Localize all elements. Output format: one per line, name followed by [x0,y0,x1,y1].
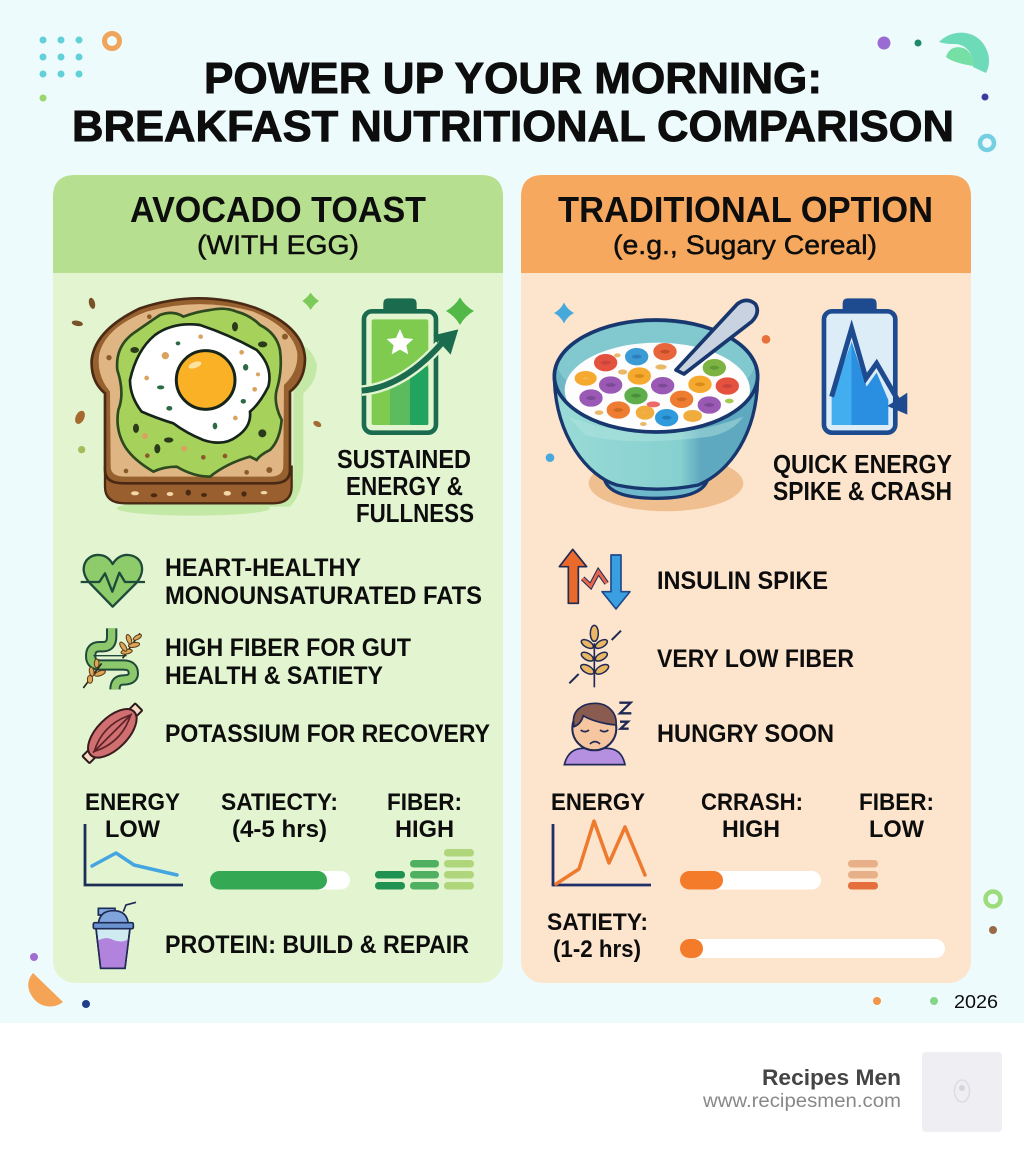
text: protein: PROTEIN: BUILD & REPAIR [165,931,469,959]
panel header: avocado toast [53,175,503,273]
stat: satiety bar: (4-5 hrs) [232,816,327,843]
panel header: avocado toast: AVOCADO TOAST [130,189,426,230]
stat: satiety bar [210,789,350,890]
logo tile [922,1052,1002,1132]
decorative dots and year: 2026 [954,992,998,1012]
footer branding: Recipes Men [762,1065,901,1090]
icon: cereal bowl [546,300,770,511]
stat: fiber high: HIGH [395,816,454,843]
title: POWER UP YOUR MORNING: [204,54,822,103]
stat: fiber high [375,789,474,890]
stat: satiety short bar: SATIETY: [547,909,648,936]
stat: energy spike chart: ENERGY [551,789,645,816]
text: heart healthy fats: HEART-HEALTHY [165,554,361,582]
title: BREAKFAST NUTRITIONAL COMPARISON [72,102,954,151]
panel header: traditional option: (e.g., Sugary Cereal) [613,230,877,260]
icon: protein shaker [93,902,136,968]
stat: crash bar: HIGH [722,816,780,843]
text: hungry soon: HUNGRY SOON [657,720,834,748]
icon: insulin arrows [559,549,630,609]
icon: avocado toast with egg [71,293,322,516]
stat: crash bar [680,789,821,890]
text: heart healthy fats [165,554,482,610]
panel header: traditional option [521,175,971,273]
text: sustained energy and fullness: FULLNESS [356,498,474,528]
stat: fiber low: LOW [869,816,924,843]
decorative shapes right [986,892,1000,934]
text: very low fiber: VERY LOW FIBER [657,645,854,673]
stat: energy low [85,789,183,885]
stat: satiety short bar: (1-2 hrs) [553,936,641,963]
stat: crash bar: CRRASH: [701,789,803,816]
stat: energy low: LOW [105,816,160,843]
text: sustained energy and fullness: ENERGY & [346,471,463,501]
footer branding: www.recipesmen.com [702,1091,901,1112]
icon: gut and wheat [83,628,142,689]
decorative shapes top left [40,34,120,102]
title [72,54,954,151]
stat: satiety short bar [547,909,945,963]
text: high fiber [165,634,411,690]
text: sustained energy and fullness [337,444,474,528]
text: high fiber: HEALTH & SATIETY [165,662,383,690]
icon: wheat low fiber [569,625,621,687]
stat: energy low: ENERGY [85,789,180,816]
panel: avocado toast [53,175,503,983]
text: quick energy spike and crash: QUICK ENERGY [773,449,952,479]
decorative dots and year [873,992,998,1012]
icon: muscle [75,696,150,771]
text: quick energy spike and crash: SPIKE & CRASH [773,476,952,506]
decorative shapes top right [878,33,994,150]
decorative shapes bottom left [28,953,90,1008]
stat: fiber low [848,789,934,890]
icon: sustained energy battery [362,297,474,433]
panel: traditional option [521,175,971,983]
text: quick energy spike and crash [773,449,952,506]
text: insulin spike: INSULIN SPIKE [657,567,828,595]
stat: satiety bar: SATIECTY: [221,789,338,816]
text: high fiber: HIGH FIBER FOR GUT [165,634,411,662]
panel header: traditional option: TRADITIONAL OPTION [558,189,933,230]
icon: sleepy hungry person [564,703,631,765]
icon: energy crash battery [824,298,907,433]
text: heart healthy fats: MONOUNSATURATED FATS [165,582,482,610]
icon: heart with pulse [81,555,145,607]
stat: fiber high: FIBER: [387,789,462,816]
footer branding [702,1052,1002,1132]
text: sustained energy and fullness: SUSTAINED [337,444,471,474]
stat: fiber low: FIBER: [859,789,934,816]
stat: energy spike chart [551,789,651,885]
panel header: avocado toast: (WITH EGG) [197,230,359,260]
text: potassium: POTASSIUM FOR RECOVERY [165,720,490,748]
